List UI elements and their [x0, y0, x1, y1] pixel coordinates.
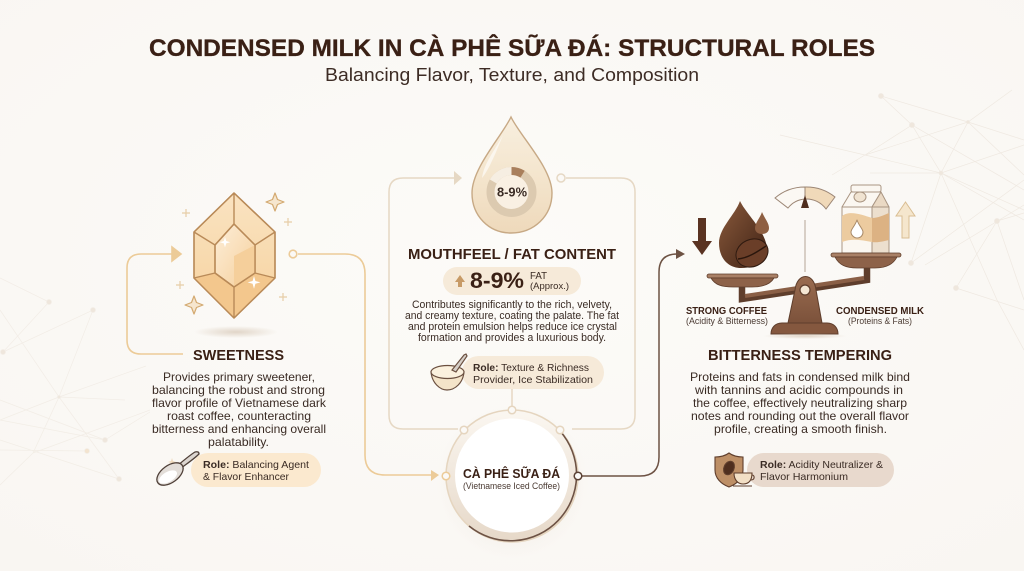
panel: central hub [436, 406, 588, 558]
decorative network: left [0, 278, 150, 485]
role pill: bitterness: Role: Acidity Neutralizer & [760, 459, 883, 471]
panel: sweetness [152, 193, 327, 490]
heading: sweetness: SWEETNESS [193, 347, 284, 364]
label: condensed milk [836, 305, 924, 326]
text: sweetness body: balancing the robust and strong [152, 383, 325, 397]
role pill: mouthfeel [462, 356, 604, 389]
role pill: mouthfeel: Role: Texture & Richness [473, 362, 589, 374]
icon: coffee drop with bean [719, 201, 773, 272]
title: CONDENSED MILK IN CÀ PHÊ SỮA ĐÁ: STRUCTURAL ROLES [149, 34, 875, 62]
label: condensed milk: (Proteins & Fats) [848, 316, 912, 326]
icon: sparkles [176, 193, 292, 314]
panel: mouthfeel [405, 117, 619, 390]
text: bitterness body: the coffee, effectively neutralizing sharp [693, 396, 907, 410]
hub connector dots [442, 406, 582, 480]
hub subtitle: (Vietnamese Iced Coffee) [463, 481, 560, 491]
icon: milk drop [472, 117, 552, 233]
icon: gem [194, 193, 278, 338]
connector: bitterness arrow [582, 249, 685, 476]
connector: mouthfeel loop [389, 171, 635, 429]
text: bitterness body: with tannins and acidic compounds in [694, 383, 903, 397]
text: bitterness body [690, 370, 910, 436]
heading: bitterness tempering: BITTERNESS TEMPERING [708, 347, 892, 364]
label: strong coffee [686, 305, 768, 326]
icon: spoon [153, 452, 199, 490]
stat pill: fat percentage: 8-9% [470, 268, 524, 293]
role pill: sweetness [191, 453, 321, 487]
text: sweetness body: flavor profile of Vietnamese dark [152, 396, 327, 410]
role pill: bitterness: Flavor Harmonium [760, 471, 848, 483]
role pill: sweetness: Role: Balancing Agent [203, 459, 309, 471]
icon: shield and cup [715, 453, 754, 487]
text: bitterness body: profile, creating a smooth finish. [714, 422, 887, 436]
label: strong coffee: (Acidity & Bitterness) [686, 316, 768, 326]
role pill: bitterness [747, 453, 894, 487]
text: sweetness body: Provides primary sweetener, [163, 370, 315, 384]
text: mouthfeel body: and creamy texture, coating the palate. The fat [405, 310, 619, 322]
label: strong coffee: STRONG COFFEE [686, 305, 767, 317]
stat pill: fat percentage: FAT [530, 271, 547, 282]
decorative network: right [780, 90, 1024, 350]
text: mouthfeel body: formation and provides a luxurious body. [418, 332, 606, 344]
hub ring [436, 406, 588, 558]
text: mouthfeel body: and protein emulsion helps reduce ice crystal [408, 321, 617, 333]
icon: up arrow [896, 202, 915, 238]
text: mouthfeel body [405, 299, 619, 344]
subtitle: Balancing Flavor, Texture, and Composition [325, 65, 699, 85]
icon: down arrow [692, 218, 712, 255]
role pill: mouthfeel: Provider, Ice Stabilization [473, 374, 593, 386]
heading: mouthfeel: MOUTHFEEL / FAT CONTENT [408, 246, 616, 263]
panel: bitterness tempering [686, 185, 924, 487]
icon: milk carton [842, 185, 889, 253]
text: bitterness body: Proteins and fats in condensed milk bind [690, 370, 910, 384]
text: bitterness body: notes and rounding out the overall flavor [691, 409, 909, 423]
text: mouthfeel body: Contributes significantly to the rich, velvety, [412, 299, 612, 311]
text: sweetness body: palatability. [208, 435, 269, 449]
connector: sweetness loop [127, 247, 439, 481]
label: condensed milk: CONDENSED MILK [836, 305, 924, 317]
hub title: CÀ PHÊ SỮA ĐÁ [463, 466, 561, 481]
icon: bowl [431, 354, 467, 390]
text: sweetness body: bitterness and enhancing overall [152, 422, 326, 436]
text: sweetness body: roast coffee, counteracting [167, 409, 311, 423]
text: drop value: 8-9% [497, 186, 527, 200]
role pill: sweetness: & Flavor Enhancer [203, 471, 289, 483]
stat pill: fat percentage [443, 267, 581, 295]
stat pill: fat percentage: (Approx.) [530, 281, 569, 292]
text: sweetness body [152, 370, 327, 449]
icon: gauge [775, 187, 835, 272]
icon: balance scale [707, 253, 901, 339]
